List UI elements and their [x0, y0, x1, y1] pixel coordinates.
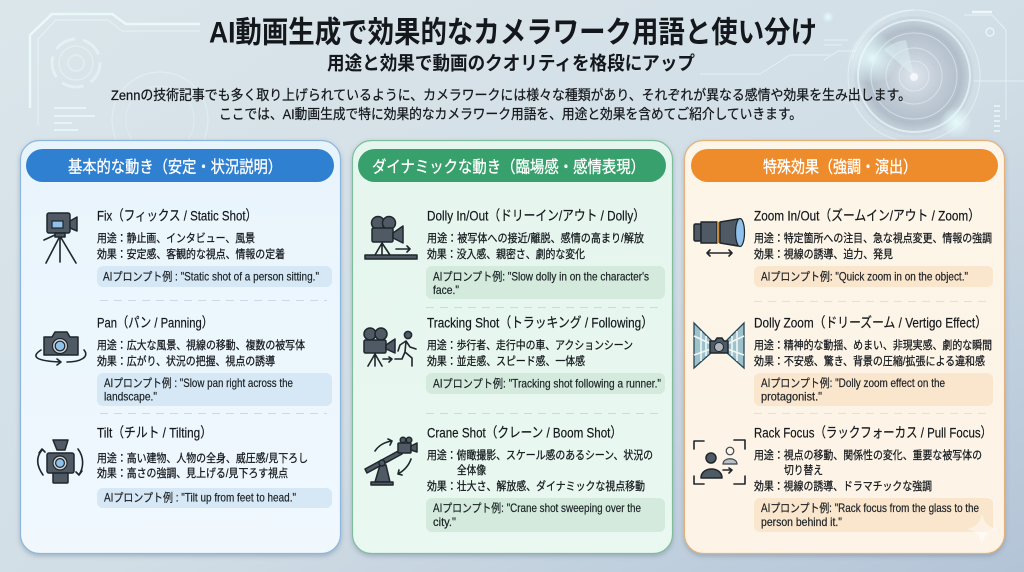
prompt box: person behind it.": [761, 516, 842, 529]
item: Zoom In/Out: 用途：特定箇所への注目、急な視点変更、情報の強調: [754, 231, 992, 245]
item: Crane Shot: Crane Shot（クレーン / Boom Shot）: [427, 424, 622, 440]
item: Tilt: Tilt（チルト / Tilting）: [97, 424, 212, 440]
icon: zoom lens: [694, 218, 744, 256]
item: Dolly Zoom: Dolly Zoom（ドリーズーム / Vertigo Effect）: [754, 314, 987, 330]
prompt box: AIプロンプト例: "Crane shot sweeping over the: [433, 501, 641, 515]
item: Rack Focus: 切り替え: [784, 463, 823, 477]
item: Tracking Shot: [364, 314, 665, 394]
item: Tilt: [38, 424, 332, 508]
icon: cinema camera following runner: [364, 328, 416, 366]
item: Pan: [36, 314, 332, 406]
intro text: [111, 87, 911, 122]
icon: focus frame with two people: [694, 440, 745, 484]
prompt box: face.": [433, 284, 459, 297]
prompt box: [426, 266, 665, 299]
item: Zoom In/Out: Zoom In/Out（ズームイン/アウト / Zoom）: [754, 208, 980, 224]
subtitle: 用途と効果で動画のクオリティを格段にアップ: [327, 52, 695, 74]
prompt box: [97, 266, 332, 287]
prompt box: [426, 373, 665, 394]
panel: special effects: [684, 140, 1004, 554]
item: Crane Shot: 用途：俯瞰撮影、スケール感のあるシーン、状況の: [427, 448, 653, 462]
prompt box: [754, 373, 993, 406]
prompt box: AIプロンプト例 : "Slow pan right across the: [104, 376, 293, 390]
item: Fix: 効果：安定感、客観的な視点、情報の定着: [97, 247, 285, 261]
item: Tracking Shot: 効果：並走感、スピード感、一体感: [427, 354, 585, 368]
icon: vertigo effect: [694, 323, 744, 368]
prompt box: AIプロンプト例 : "Tilt up from feet to head.": [104, 490, 296, 504]
item: Tracking Shot: 用途：歩行者、走行中の車、アクションシーン: [427, 338, 633, 352]
icon: camera with rotation arrow: [36, 332, 86, 365]
title: AI動画生成で効果的なカメラワーク用語と使い分け: [209, 16, 817, 50]
icon: camera on tripod: [44, 213, 77, 263]
item: Zoom In/Out: [694, 208, 993, 287]
item: Crane Shot: [365, 424, 665, 532]
prompt box: [97, 373, 332, 406]
panel: basic movements: [20, 140, 340, 554]
prompt box: [97, 488, 332, 508]
item: Tracking Shot: Tracking Shot（トラッキング / Following）: [427, 314, 653, 330]
icon: camera with tilt arrows: [38, 440, 83, 483]
item: Dolly Zoom: [694, 314, 993, 406]
item: Fix: 用途：静止画、インタビュー、風景: [97, 231, 255, 245]
item: Dolly In/Out: Dolly In/Out（ドリーイン/アウト / Dolly）: [427, 208, 645, 224]
prompt box: AIプロンプト例: "Tracking shot following a runner.": [433, 376, 661, 390]
item: Dolly In/Out: [365, 208, 665, 299]
prompt box: landscape.": [104, 390, 157, 404]
item: Dolly In/Out: 用途：被写体への接近/離脱、感情の高まり/解放: [427, 231, 644, 245]
item: Tilt: 効果：高さの強調、見上げる/見下ろす視点: [97, 466, 288, 480]
item: Rack Focus: 用途：視点の移動、関係性の変化、重要な被写体の: [754, 448, 982, 462]
prompt box: AIプロンプト例 : "Static shot of a person sitting.": [103, 270, 319, 284]
item: Fix: [44, 208, 332, 287]
item: Dolly Zoom: 効果：不安感、驚き、背景の圧縮/拡張による違和感: [754, 354, 985, 368]
panel: dynamic movements: [352, 140, 672, 554]
panel heading: special effects: [691, 149, 998, 182]
item: Pan: 用途：広大な風景、視線の移動、複数の被写体: [97, 338, 305, 352]
item: Dolly In/Out: 効果：没入感、親密さ、劇的な変化: [427, 247, 585, 261]
item: Rack Focus: 効果：視線の誘導、ドラマチックな強調: [754, 479, 932, 493]
item: Crane Shot: 全体像: [457, 463, 486, 477]
intro text: Zennの技術記事でも多く取り上げられているように、カメラワークには様々な種類があり、それぞれが異なる感情や効果を生み出します。: [111, 87, 911, 103]
panel heading: special effects: 特殊効果（強調・演出）: [763, 158, 917, 176]
item: Fix: Fix（フィックス / Static Shot）: [97, 208, 257, 224]
item: Pan: Pan（パン / Panning）: [97, 314, 213, 330]
icon: camera crane: [365, 437, 417, 485]
item: Zoom In/Out: 効果：視線の誘導、迫力、発見: [754, 247, 893, 261]
icon: sparkle watermark: [966, 513, 998, 546]
prompt box: [426, 498, 665, 532]
panel heading: dynamic movements: [358, 149, 666, 182]
item: Crane Shot: 効果：壮大さ、解放感、ダイナミックな視点移動: [427, 479, 645, 493]
item: Tilt: 用途：高い建物、人物の全身、威圧感/見下ろし: [97, 451, 308, 465]
panel heading: basic movements: [26, 149, 334, 182]
prompt box: AIプロンプト例: "Rack focus from the glass to the: [761, 501, 979, 515]
item: Rack Focus: [694, 424, 993, 532]
prompt box: protagonist.": [761, 390, 822, 404]
prompt box: AIプロンプト例: "Slow dolly in on the character's: [433, 270, 649, 284]
prompt box: [754, 498, 993, 532]
intro text: ここでは、AI動画生成で特に効果的なカメラワーク用語を、用途と効果を含めてご紹介していきます。: [219, 106, 802, 122]
panel heading: dynamic movements: ダイナミックな動き（臨場感・感情表現）: [372, 158, 645, 176]
prompt box: city.": [433, 516, 456, 529]
panel heading: basic movements: 基本的な動き（安定・状況説明）: [68, 158, 282, 176]
item: Pan: 効果：広がり、状況の把握、視点の誘導: [97, 354, 275, 368]
item: Dolly Zoom: 用途：精神的な動揺、めまい、非現実感、劇的な瞬間: [754, 338, 992, 352]
prompt box: AIプロンプト例: "Quick zoom in on the object.": [761, 270, 968, 284]
prompt box: AIプロンプト例: "Dolly zoom effect on the: [761, 376, 945, 390]
prompt box: [754, 266, 993, 287]
icon: cinema camera on dolly track: [365, 216, 417, 259]
